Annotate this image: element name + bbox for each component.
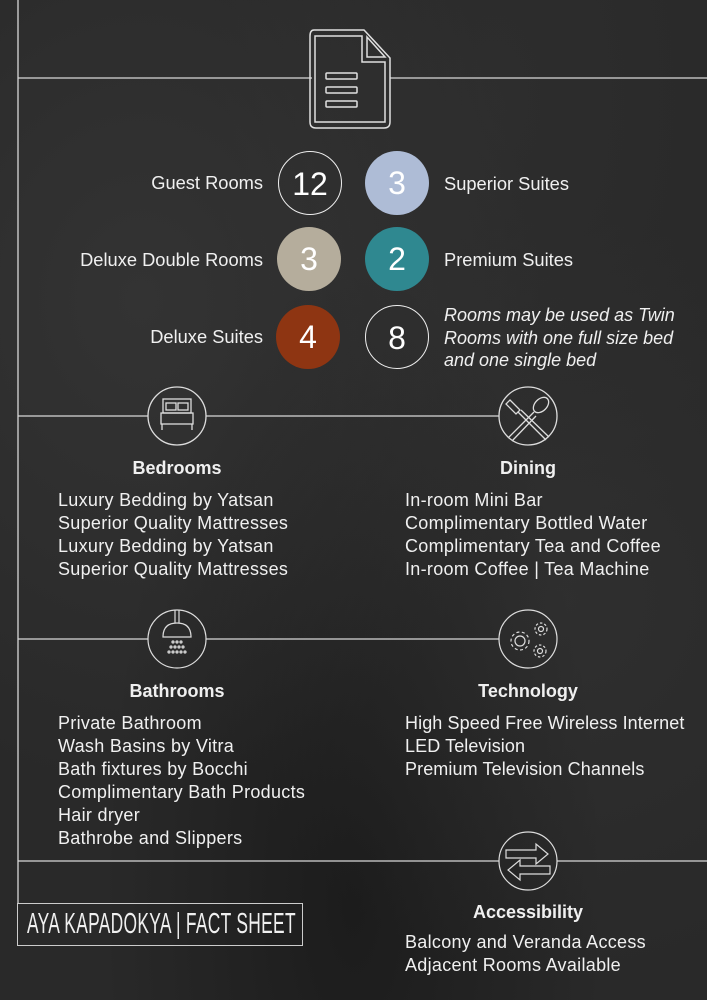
- panel: bathrooms: Complimentary Bath Products: [58, 782, 305, 802]
- circle 12: 12: [292, 166, 328, 202]
- panel: accessibility: Adjacent Rooms Available: [405, 955, 621, 975]
- label: premium: Premium Suites: [444, 249, 573, 270]
- panel: bedrooms: Bedrooms: [132, 458, 222, 478]
- panel: dining: [405, 458, 661, 579]
- circle 4: 4: [299, 319, 317, 355]
- icon: gears: [498, 609, 558, 669]
- circle 3 superior: 3: [388, 165, 406, 201]
- panel: bedrooms: Superior Quality Mattresses: [58, 559, 288, 579]
- note italic: Rooms with one full size bed: [444, 328, 673, 348]
- icon: arrows: [498, 831, 558, 891]
- panel: dining: Complimentary Bottled Water: [405, 513, 648, 533]
- note italic: [444, 305, 675, 370]
- circle 3 superior: [365, 151, 429, 215]
- panel: technology: LED Television: [405, 736, 525, 756]
- panel: bedrooms: [58, 458, 288, 579]
- circle 4: [276, 305, 340, 369]
- panel: bathrooms: Bath fixtures by Bocchi: [58, 759, 248, 779]
- label: superior suites: Superior Suites: [444, 173, 569, 194]
- note italic: and one single bed: [444, 350, 596, 370]
- label: deluxe double: Deluxe Double Rooms: [80, 249, 263, 270]
- icon: bed: [147, 386, 207, 446]
- circle 2 premium: 2: [388, 241, 406, 277]
- panel: bathrooms: Hair dryer: [58, 805, 140, 825]
- panel: accessibility: Balcony and Veranda Access: [405, 932, 646, 952]
- room counts: [80, 151, 675, 370]
- label: guest rooms: Guest Rooms: [151, 172, 263, 193]
- icon: shower: [147, 609, 207, 669]
- circle 8: 8: [388, 320, 406, 356]
- circle 3 deluxe: 3: [300, 241, 318, 277]
- panel: technology: [405, 681, 684, 779]
- panel: accessibility: [405, 902, 646, 975]
- panel: dining: In-room Mini Bar: [405, 490, 543, 510]
- panel: bathrooms: Bathrobe and Slippers: [58, 828, 242, 848]
- panel: technology: Premium Television Channels: [405, 759, 644, 779]
- panel: bathrooms: Bathrooms: [129, 681, 224, 701]
- panel: bedrooms: Luxury Bedding by Yatsan: [58, 536, 274, 556]
- panel: technology: Technology: [478, 681, 578, 701]
- panel: accessibility: Accessibility: [473, 902, 583, 922]
- panel: bedrooms: Superior Quality Mattresses: [58, 513, 288, 533]
- panel: bathrooms: [58, 681, 305, 848]
- panel: bedrooms: Luxury Bedding by Yatsan: [58, 490, 274, 510]
- panel: bathrooms: Private Bathroom: [58, 713, 202, 733]
- icon: document: [309, 29, 391, 129]
- panel: dining: Complimentary Tea and Coffee: [405, 536, 661, 556]
- circle 3 deluxe: [277, 227, 341, 291]
- icon: dining: [498, 386, 558, 446]
- panel: dining: Dining: [500, 458, 556, 478]
- note italic: Rooms may be used as Twin: [444, 305, 675, 325]
- title box: AYA KAPADOKYA | FACT SHEET: [27, 908, 296, 940]
- circle 8: [365, 305, 429, 369]
- circle 2 premium: [365, 227, 429, 291]
- panel: dining: In-room Coffee | Tea Machine: [405, 559, 650, 579]
- circle 12: [278, 151, 342, 215]
- label: deluxe suites: Deluxe Suites: [150, 326, 263, 347]
- panel: technology: High Speed Free Wireless Internet: [405, 713, 684, 733]
- panel: bathrooms: Wash Basins by Vitra: [58, 736, 234, 756]
- title box: [17, 903, 303, 946]
